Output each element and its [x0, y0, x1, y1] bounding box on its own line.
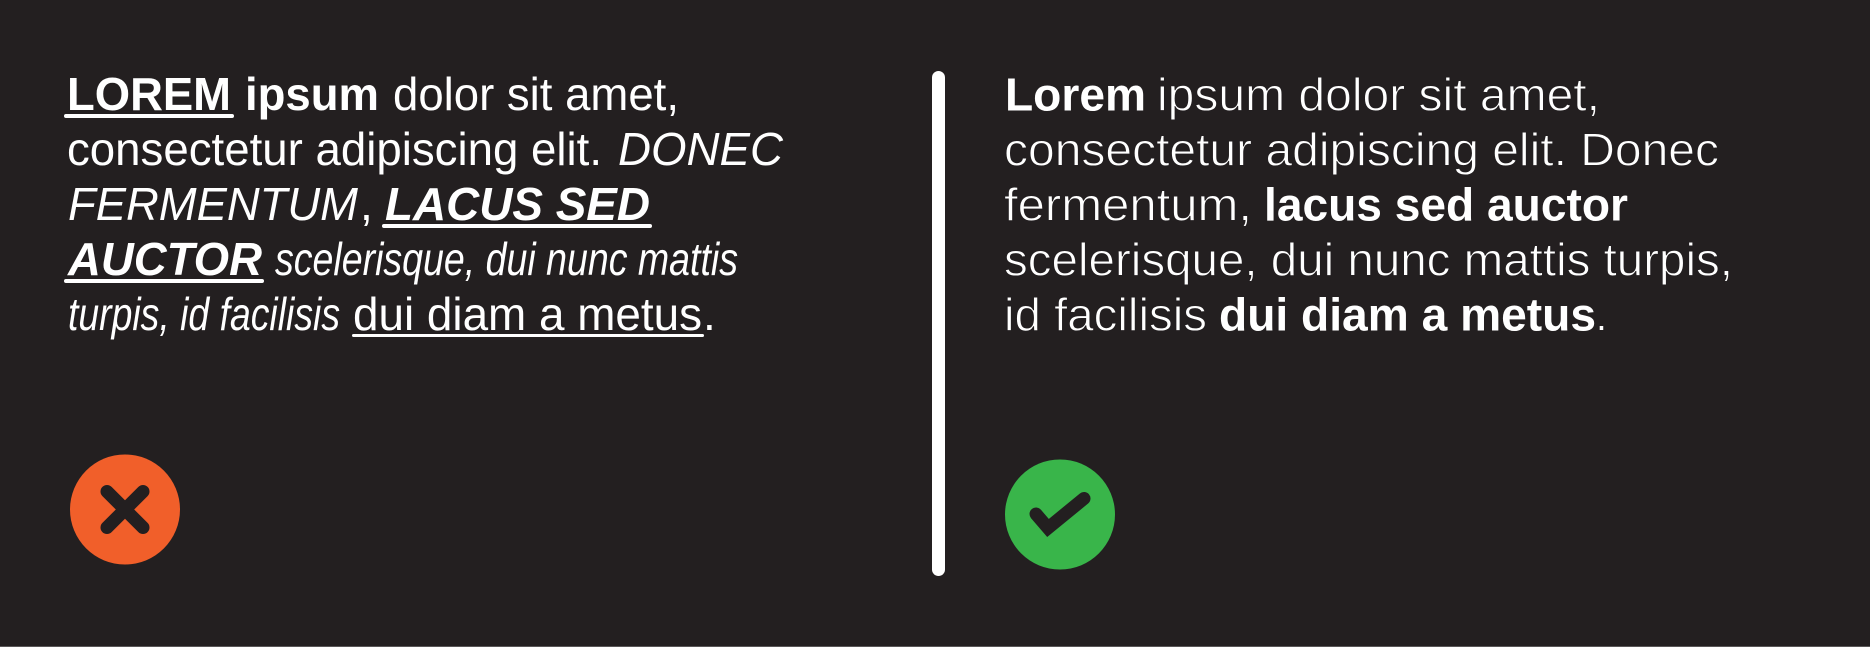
text block: mixed styles paragraph: LOREM: [67, 68, 231, 120]
text block: clean paragraph: dui diam a metus: [1219, 288, 1596, 340]
text block: mixed styles paragraph: LACUS SED: [385, 178, 650, 230]
text block: mixed styles paragraph: DONEC: [618, 123, 784, 175]
text block: mixed styles paragraph: turpis, id facilisis: [68, 288, 340, 340]
text block: mixed styles paragraph: dolor sit amet,: [393, 68, 679, 120]
text block: mixed styles paragraph: scelerisque, dui nunc mattis: [275, 233, 738, 285]
panel: bad typography example: [64, 68, 784, 564]
text block: clean paragraph: lacus sed auctor: [1264, 178, 1628, 230]
text block: mixed styles paragraph: .: [703, 288, 716, 340]
text block: clean paragraph: ipsum dolor sit amet,: [1157, 68, 1600, 120]
text block: clean paragraph: consectetur adipiscing elit. Donec: [1004, 124, 1719, 176]
icon: green check: [1005, 460, 1115, 570]
text block: clean paragraph: fermentum,: [1004, 178, 1252, 230]
text block: clean paragraph: [1004, 68, 1733, 340]
text block: mixed styles paragraph: ipsum: [245, 68, 379, 120]
text block: mixed styles paragraph: ,: [360, 178, 373, 230]
text block: clean paragraph: id facilisis: [1004, 288, 1207, 340]
text block: clean paragraph: scelerisque, dui nunc mattis turpis,: [1004, 234, 1733, 286]
panel: good typography example: [1004, 68, 1733, 570]
text block: mixed styles paragraph: consectetur adipiscing elit.: [67, 123, 602, 175]
divider: [932, 71, 945, 576]
text block: mixed styles paragraph: AUCTOR: [67, 233, 262, 285]
text block: clean paragraph: .: [1595, 288, 1608, 340]
text block: mixed styles paragraph: [64, 68, 784, 340]
icon: orange cross: [70, 454, 180, 564]
text block: mixed styles paragraph: FERMENTUM: [68, 178, 359, 230]
text block: clean paragraph: Lorem: [1005, 68, 1146, 120]
text block: mixed styles paragraph: dui diam a metus: [353, 288, 702, 340]
